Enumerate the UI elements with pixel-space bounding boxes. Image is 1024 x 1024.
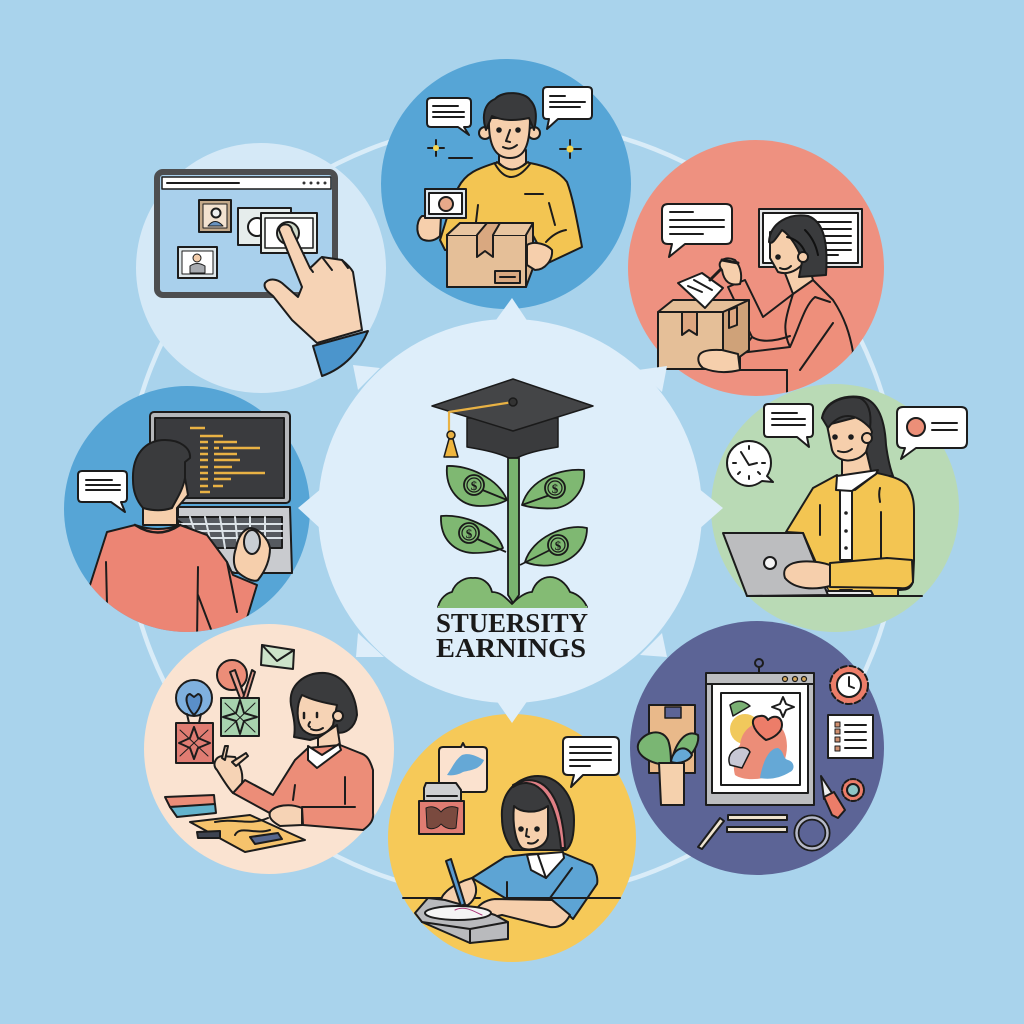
person: woman in coral bbox=[728, 215, 853, 400]
image card bbox=[439, 743, 487, 792]
sparkles bbox=[428, 140, 581, 158]
speech bubble right bbox=[543, 87, 592, 129]
raised hand bbox=[215, 746, 248, 793]
icon: box bbox=[658, 258, 749, 369]
dollar signs on leaves bbox=[466, 478, 562, 553]
icon: banknote in hand bbox=[417, 189, 466, 241]
icon: money plant bbox=[438, 458, 587, 607]
banknotes bbox=[238, 208, 317, 253]
panel: tablet purchase bbox=[136, 143, 386, 393]
speech bubble bbox=[563, 737, 619, 787]
hand with mouse bbox=[234, 528, 270, 581]
poster bbox=[759, 209, 862, 267]
lightbulb craft card red bbox=[176, 680, 213, 763]
laptop bbox=[150, 412, 292, 573]
small gear bbox=[842, 779, 864, 801]
pinned craft card green bbox=[217, 660, 259, 736]
dollar signs on leaves: $ bbox=[466, 526, 473, 541]
dollar signs on leaves: $ bbox=[552, 481, 559, 496]
checklist bbox=[828, 715, 873, 758]
speech bubble left bbox=[427, 98, 471, 135]
panel: digital art on tablet bbox=[630, 621, 884, 875]
pointing hand bbox=[265, 224, 362, 343]
art tools bbox=[698, 776, 845, 849]
drawing slab bbox=[415, 898, 508, 943]
person: yellow sweater bbox=[440, 93, 582, 263]
photo card bottom bbox=[178, 247, 217, 278]
code lines bbox=[190, 428, 265, 492]
icon: graduation cap bbox=[432, 379, 593, 460]
artist tablet bbox=[706, 659, 814, 805]
dollar signs on leaves: $ bbox=[555, 538, 562, 553]
student head bbox=[502, 776, 574, 850]
panel: person packing box bbox=[628, 140, 884, 400]
envelope bbox=[261, 645, 294, 669]
pencil bbox=[446, 859, 465, 906]
craft paper bbox=[165, 795, 305, 852]
infographic canvas bbox=[64, 59, 968, 962]
programmer from behind bbox=[90, 440, 257, 640]
panel: seller with parcel bbox=[381, 59, 631, 309]
photo card top bbox=[199, 200, 231, 232]
arm and hand bbox=[747, 558, 922, 596]
person: woman in yellow bbox=[786, 397, 914, 596]
gear clock bbox=[830, 666, 868, 704]
stamp box bbox=[419, 783, 464, 834]
speech bubble bbox=[78, 471, 127, 512]
panel: crafter at desk bbox=[144, 624, 394, 874]
blue shirt and arms bbox=[403, 852, 620, 927]
speech bubble small bbox=[764, 404, 813, 447]
icon: clock bubble bbox=[727, 441, 773, 486]
title: EARNINGS bbox=[436, 633, 586, 663]
title: STUERSITY bbox=[436, 608, 588, 638]
artwork on tablet bbox=[729, 697, 794, 779]
tablet bbox=[157, 172, 335, 295]
hand on box bbox=[698, 350, 740, 372]
speech bubble bbox=[662, 204, 732, 257]
panel: programmer at laptop bbox=[64, 386, 310, 640]
laptop bbox=[723, 533, 873, 596]
dollar signs on leaves: $ bbox=[471, 478, 478, 493]
title bbox=[436, 608, 588, 663]
speech bubble with dot bbox=[897, 407, 967, 459]
woman head bbox=[291, 673, 357, 750]
panel: central hub bbox=[298, 298, 723, 723]
panel: person on laptop bbox=[711, 384, 967, 632]
panel: student drawing bbox=[388, 714, 636, 962]
potted plant bbox=[638, 705, 698, 805]
sleeve bbox=[313, 331, 368, 376]
icon: cardboard box bbox=[447, 223, 552, 287]
sweater bbox=[233, 744, 373, 830]
